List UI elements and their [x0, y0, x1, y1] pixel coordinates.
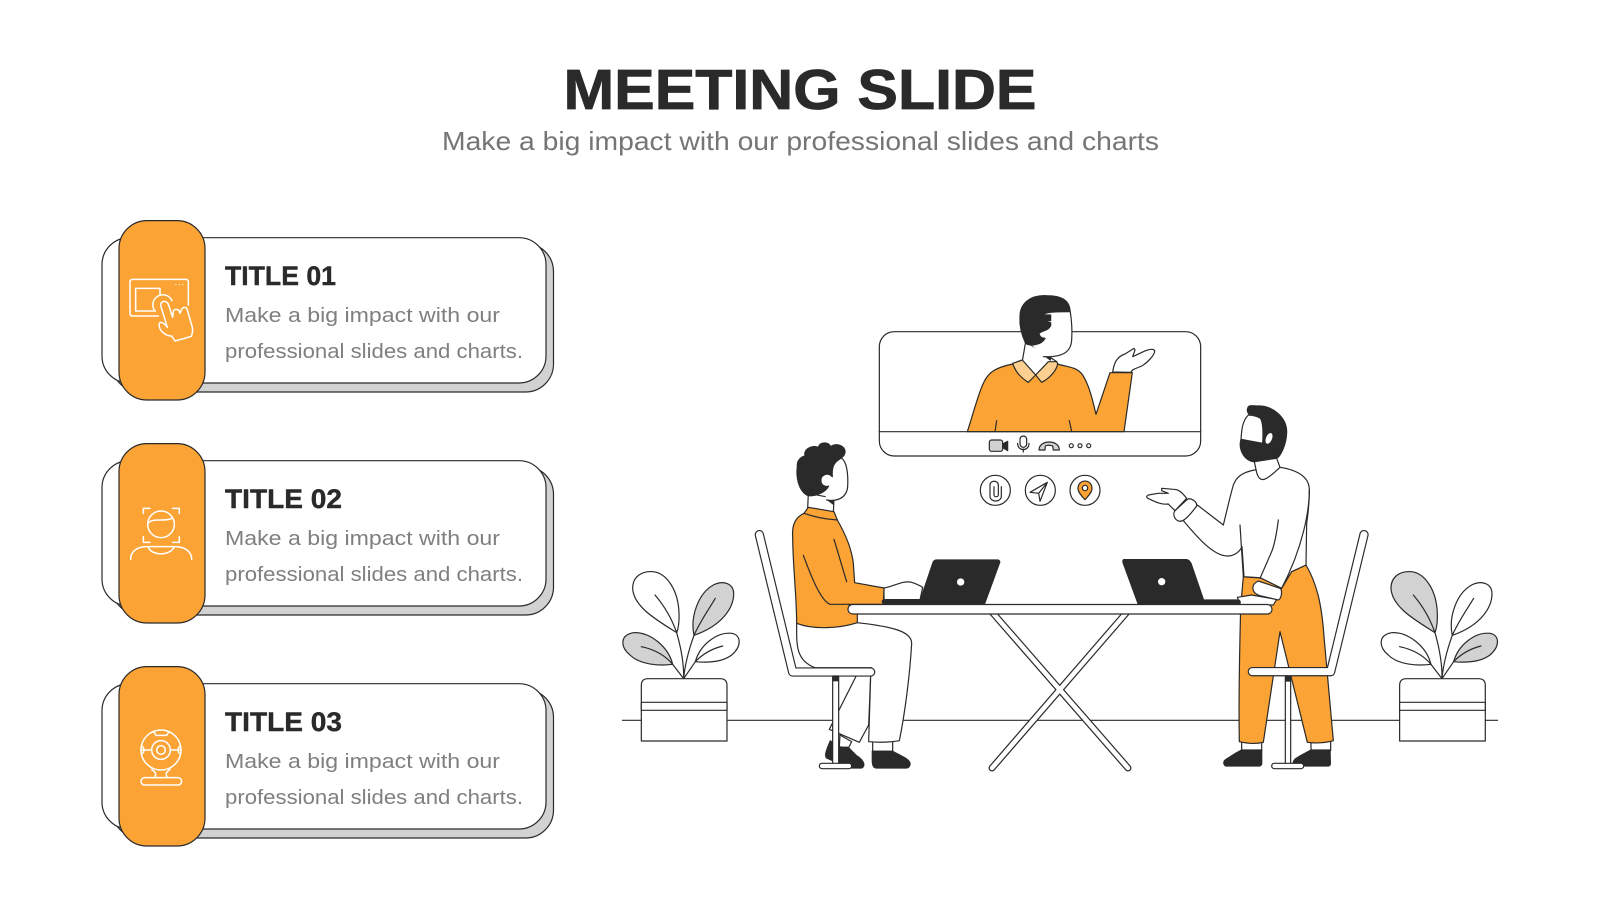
icons: attach, send, location: [980, 475, 1100, 505]
illustration: meeting scene: [622, 296, 1498, 769]
icon: left plant: [623, 572, 739, 741]
laptop: left: [882, 559, 1000, 604]
heading: title 01: TITLE 01: [225, 261, 336, 291]
text: description 01: professional slides and charts.: [225, 341, 523, 363]
heading: title 03: TITLE 03: [225, 707, 342, 737]
text: description 02: Make a big impact with our: [225, 528, 500, 550]
title: MEETING SLIDE: [564, 58, 1036, 122]
left chair: [759, 535, 871, 769]
panel: card 02: [102, 444, 554, 623]
remote person: [967, 296, 1155, 432]
icon: touch screen: [130, 279, 193, 341]
heading: title 02: TITLE 02: [225, 484, 342, 514]
text: description 01: Make a big impact with our: [225, 305, 500, 327]
floor line: [622, 719, 1498, 721]
text: description 03: professional slides and charts.: [225, 787, 523, 809]
right chair: [1252, 535, 1364, 769]
icon: webcam: [141, 730, 182, 785]
person: seated man: [759, 443, 923, 769]
call controls: [989, 436, 1091, 452]
panel: video call window: [879, 296, 1201, 456]
text: description 03: Make a big impact with our: [225, 751, 500, 773]
person: standing man: [1147, 406, 1364, 769]
icon: face scan: [131, 508, 192, 559]
laptop: right: [1122, 559, 1241, 604]
panel: card 03: [102, 667, 554, 846]
table: [848, 604, 1272, 768]
panel: card 01: [102, 221, 554, 400]
icon: right plant: [1381, 572, 1497, 741]
subtitle: Make a big impact with our professional slides and charts: [442, 126, 1159, 156]
text: description 02: professional slides and charts.: [225, 564, 523, 586]
